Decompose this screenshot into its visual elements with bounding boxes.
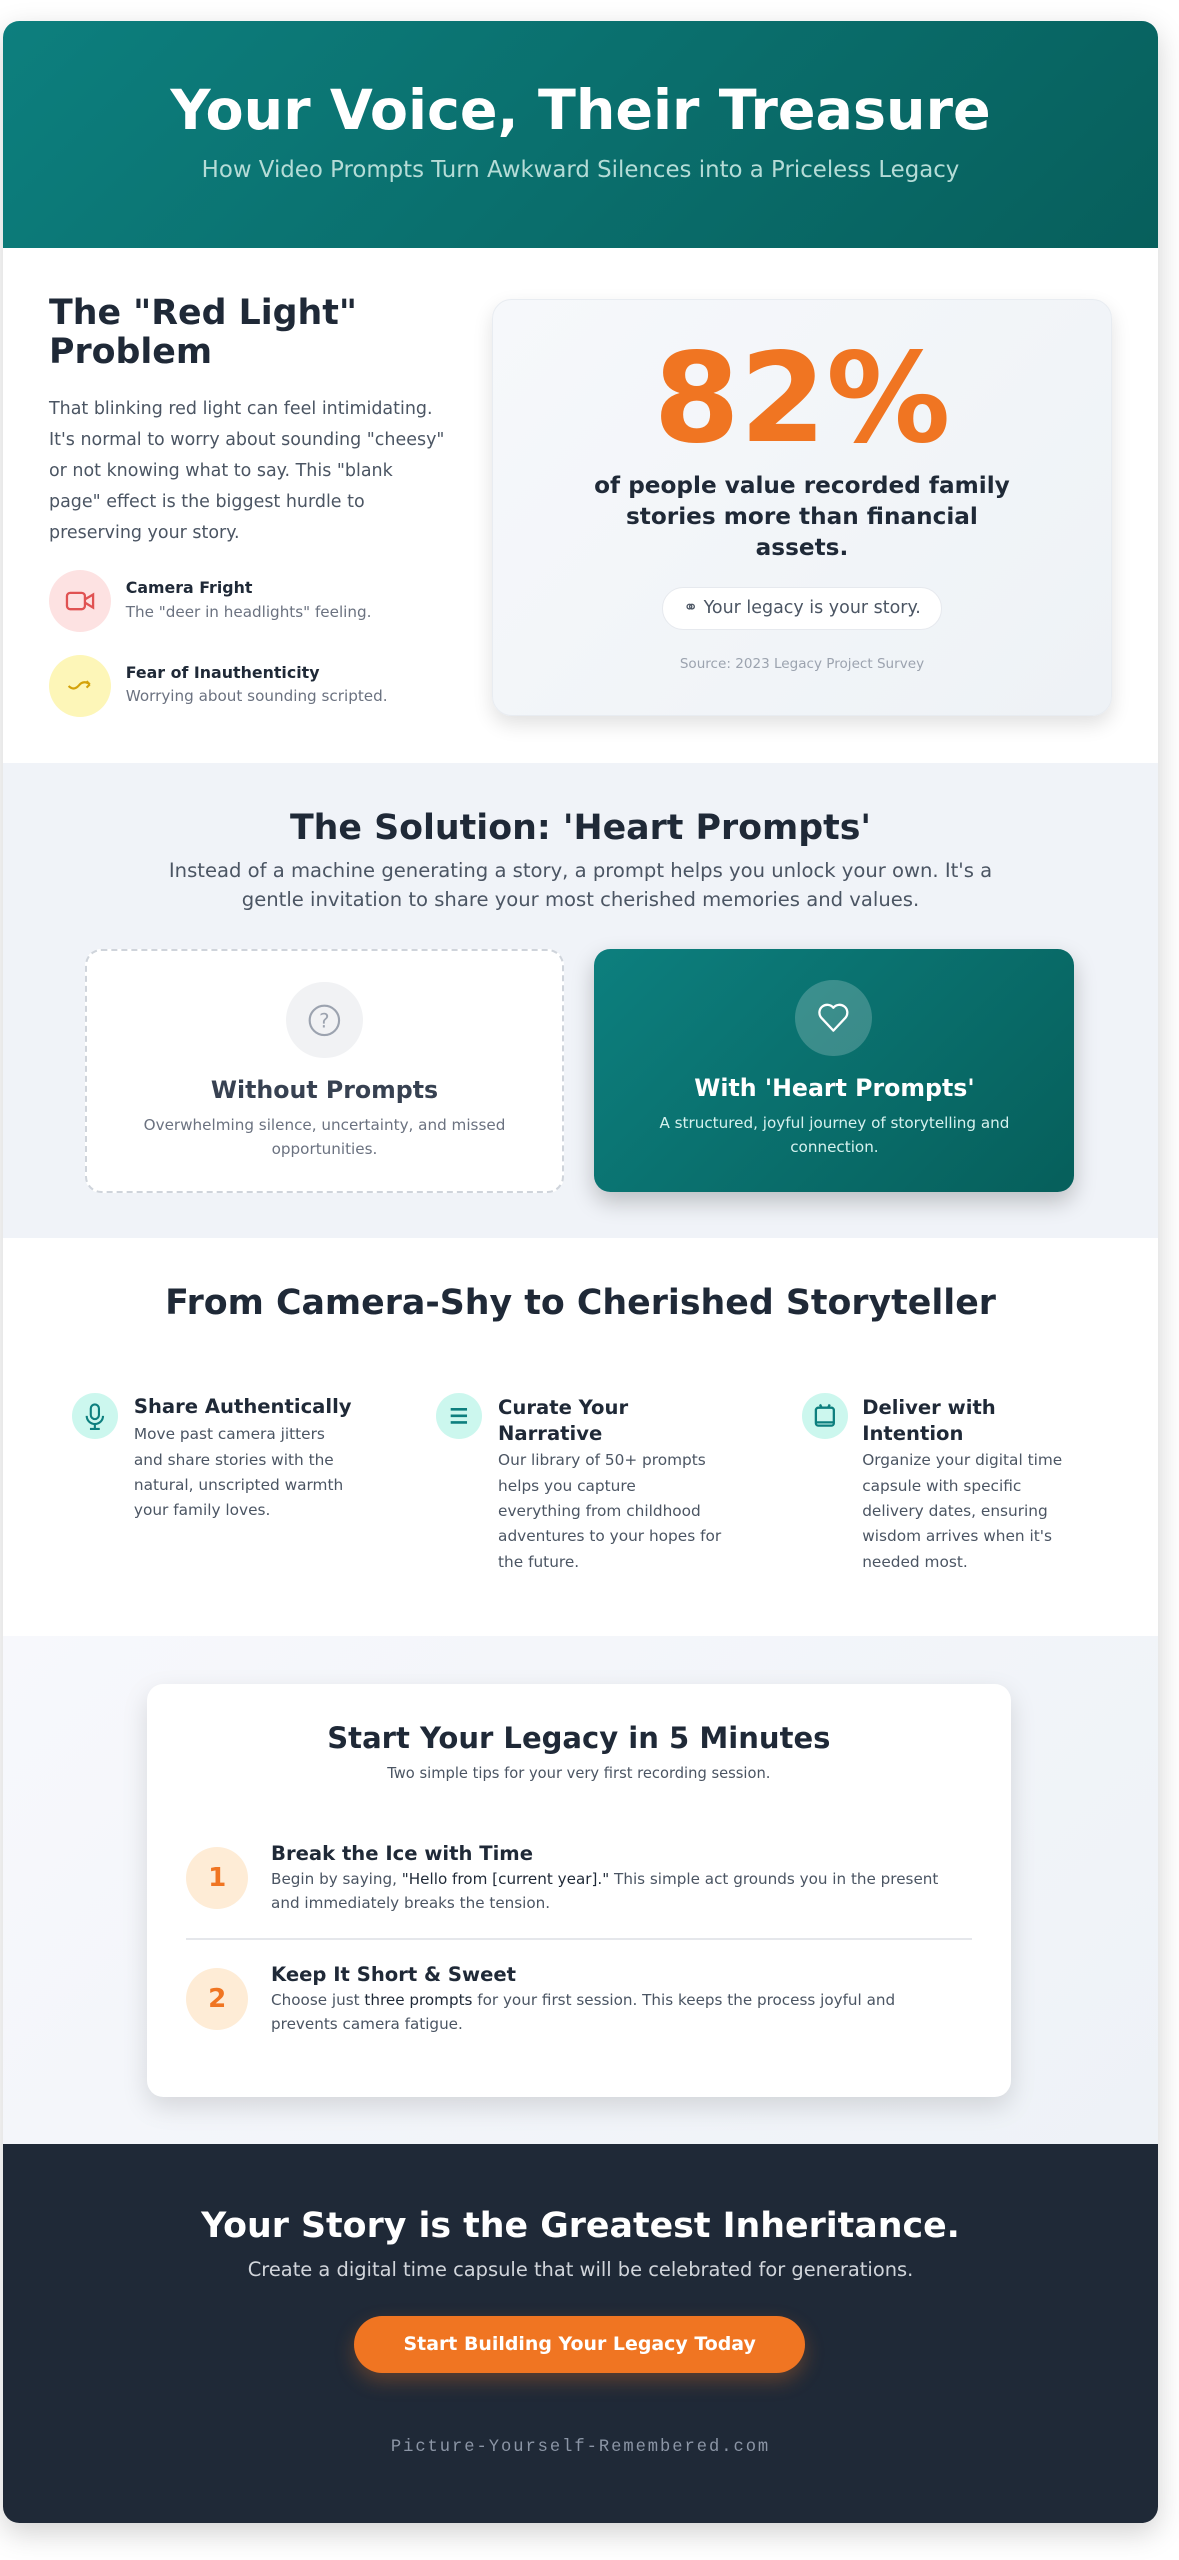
title: Curate Your: [498, 1396, 628, 1419]
feature 2: [436, 1393, 722, 1571]
tip 2: [186, 1963, 895, 2033]
domain: Picture-Yourself-Remembered.com: [391, 2438, 770, 2457]
title: Without Prompts: [211, 1076, 438, 1104]
intro text: Instead of a machine generating a story, a prompt helps you unlock your own. It's a gentle invitation to share your most cherished memories and values.: [169, 859, 992, 911]
title: [862, 1396, 996, 1445]
icon: question: ?: [319, 1009, 330, 1032]
source: Source: 2023 Legacy Project Survey: [680, 656, 924, 672]
header: [3, 21, 1158, 248]
CTA button: Start Building Your Legacy Today: [404, 2333, 756, 2355]
paragraph: preserving your story.: [49, 523, 240, 543]
paragraph: page" effect is the biggest hurdle to: [49, 492, 365, 512]
label: Fear of Inauthenticity: [126, 663, 320, 682]
stat text: of people value recorded family stories more than financial assets.: [594, 472, 1010, 561]
icon: mic: [72, 1393, 118, 1439]
icon: heart: [795, 980, 872, 1056]
title: Narrative: [498, 1422, 602, 1445]
desc: Organize your digital time capsule with specific delivery dates, ensuring wisdom arrives when it's needed most.: [862, 1451, 1062, 1571]
heading: From Camera-Shy to Cherished Storyteller: [165, 1283, 996, 1323]
desc: everything from childhood adventures to your hopes for the future.: [498, 1502, 721, 1571]
heading: [49, 293, 357, 372]
card: without prompts: [85, 949, 564, 1193]
heading: Start Your Legacy in 5 Minutes: [327, 1721, 830, 1755]
title: Intention: [862, 1422, 963, 1445]
desc: Overwhelming silence, uncertainty, and missed opportunities.: [144, 1116, 505, 1158]
number badge: [186, 1968, 248, 2030]
tip 1: [186, 1842, 938, 1912]
stat card: [492, 299, 1112, 716]
icon: question: [286, 982, 363, 1058]
feature 3: [802, 1393, 1062, 1571]
section: solution: [3, 763, 1158, 1238]
heading: Problem: [49, 332, 212, 372]
paragraph: It's normal to worry about sounding "cheesy": [49, 430, 444, 450]
title: With 'Heart Prompts': [694, 1074, 975, 1102]
pill: ⚭ Your legacy is your story.: [683, 598, 921, 618]
desc: The "deer in headlights" feeling.: [126, 603, 371, 621]
title: [498, 1396, 628, 1445]
pill: [662, 587, 942, 630]
card: with heart prompts: [594, 949, 1074, 1192]
tips card: [147, 1684, 1011, 2097]
icon: camera: [49, 570, 111, 632]
icon: list: [436, 1393, 482, 1439]
desc: A structured, joyful journey of storytelling and connection.: [659, 1114, 1009, 1156]
paragraph: or not knowing what to say. This "blank: [49, 461, 393, 481]
paragraph: [48, 399, 444, 543]
desc: Worrying about sounding scripted.: [126, 687, 388, 705]
heading: The "Red Light": [49, 293, 357, 333]
section: start legacy: [3, 1636, 1158, 2144]
subheading: Two simple tips for your very first recording session.: [387, 1765, 770, 1782]
number badge: 1: [208, 1863, 226, 1893]
label: Camera Fright: [126, 578, 252, 597]
number badge: [186, 1847, 248, 1909]
paragraph: That blinking red light can feel intimidating.: [49, 399, 433, 419]
desc: Our library of 50+ prompts helps you capture: [498, 1451, 706, 1495]
big number: 82%: [653, 327, 950, 471]
title: Your Voice, Their Treasure: [170, 78, 991, 143]
title: Deliver with: [862, 1396, 996, 1419]
desc: Choose just three prompts for your first session. This keeps the process joyful and prevents camera fatigue.: [271, 1991, 895, 2033]
icon: tv capsule: [802, 1393, 848, 1439]
title: Break the Ice with Time: [271, 1842, 533, 1865]
item: inauthenticity: [49, 655, 388, 717]
desc: Begin by saying, "Hello from [current year]." This simple act grounds you in the present and immediately breaks the tension.: [271, 1870, 938, 1912]
item: camera fright: [49, 570, 371, 632]
feature 1: [72, 1393, 352, 1519]
CTA button: [354, 2316, 805, 2373]
icon: mask: [49, 655, 111, 717]
subtitle: How Video Prompts Turn Awkward Silences into a Priceless Legacy: [202, 157, 959, 183]
heading: The Solution: 'Heart Prompts': [290, 808, 871, 848]
section: storyteller features: [3, 1238, 1158, 1636]
desc: Move past camera jitters and share stories with the natural, unscripted warmth your family loves.: [134, 1425, 343, 1519]
number badge: 2: [208, 1984, 226, 2014]
footer: [3, 2144, 1158, 2523]
title: Keep It Short & Sweet: [271, 1963, 516, 1986]
desc: [498, 1451, 722, 1571]
section: red light problem: [3, 248, 1158, 763]
title: Share Authentically: [134, 1395, 352, 1418]
footer subtitle: Create a digital time capsule that will be celebrated for generations.: [248, 2258, 913, 2281]
footer title: Your Story is the Greatest Inheritance.: [201, 2206, 960, 2246]
